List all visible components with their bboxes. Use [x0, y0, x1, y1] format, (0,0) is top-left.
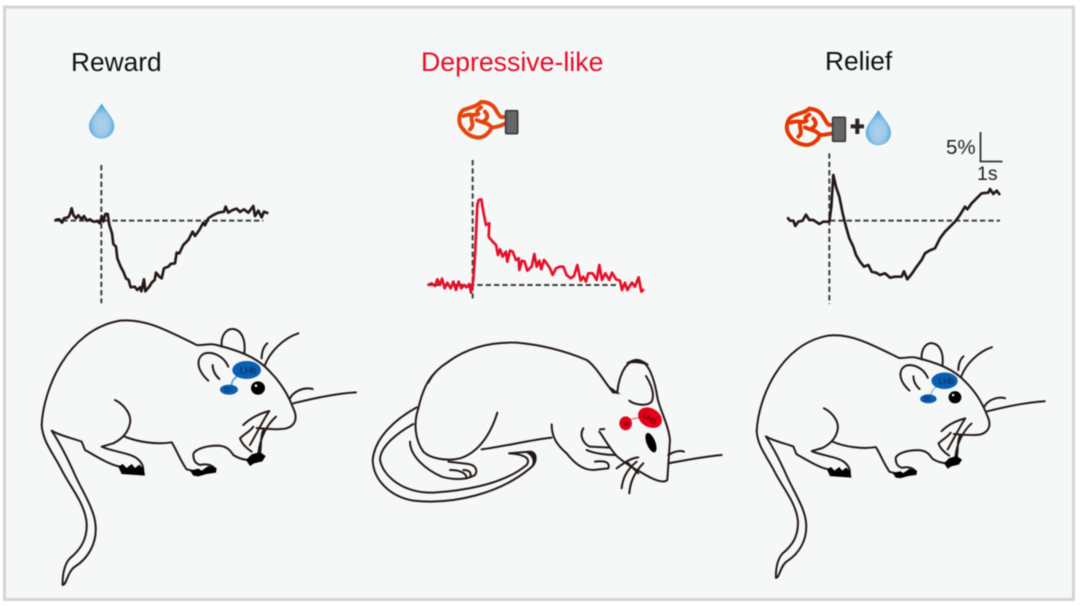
front paw [944, 456, 962, 469]
brain region: LHb [931, 373, 958, 395]
chart: reward trace [54, 165, 268, 303]
brain region: LHb [232, 361, 261, 385]
thick contour accents [428, 360, 648, 467]
scale bar: 5% and 1s [946, 132, 1002, 162]
chart: depressive-like trace [427, 160, 644, 298]
illustration: reward mouse [42, 320, 356, 585]
front paw [246, 452, 266, 466]
brain region: SI: SI [923, 394, 930, 403]
brain region: SI [619, 416, 632, 430]
brain region: LHb: LHb [641, 411, 659, 427]
heading: Relief: Relief [825, 46, 893, 76]
brain region: SI: SI [224, 385, 231, 394]
heading: Reward: Reward [71, 47, 162, 77]
scale label: 5%: 5% [946, 136, 976, 159]
eye [949, 391, 961, 403]
illustration: depressive-like mouse [373, 343, 722, 502]
heading: Depressive-like: Depressive-like [421, 47, 603, 77]
scale label: 1s: 1s [977, 163, 998, 185]
icon: water drop (reward) [89, 103, 114, 139]
hind paw [827, 467, 851, 478]
brain region: SI [220, 385, 238, 395]
brain region: LHb: LHb [240, 366, 256, 376]
icon: brain with electrode (depressive-like) [459, 102, 518, 138]
chart: relief trace [787, 153, 1000, 304]
middle paw [190, 466, 217, 476]
eye [643, 431, 659, 454]
icon: water drop (relief) [866, 110, 891, 145]
icon: plus sign [851, 119, 864, 134]
hind paw [118, 464, 145, 476]
eye [251, 381, 265, 395]
brain region: SI: SI [622, 420, 631, 429]
illustration: relief mouse [757, 335, 1045, 578]
middle paw [893, 469, 917, 478]
brain region: LHb: LHb [938, 376, 954, 386]
brain region: LHb [630, 403, 666, 432]
brain region: SI [920, 394, 937, 403]
icon: brain with electrode plus water drop (relief) [787, 109, 891, 145]
